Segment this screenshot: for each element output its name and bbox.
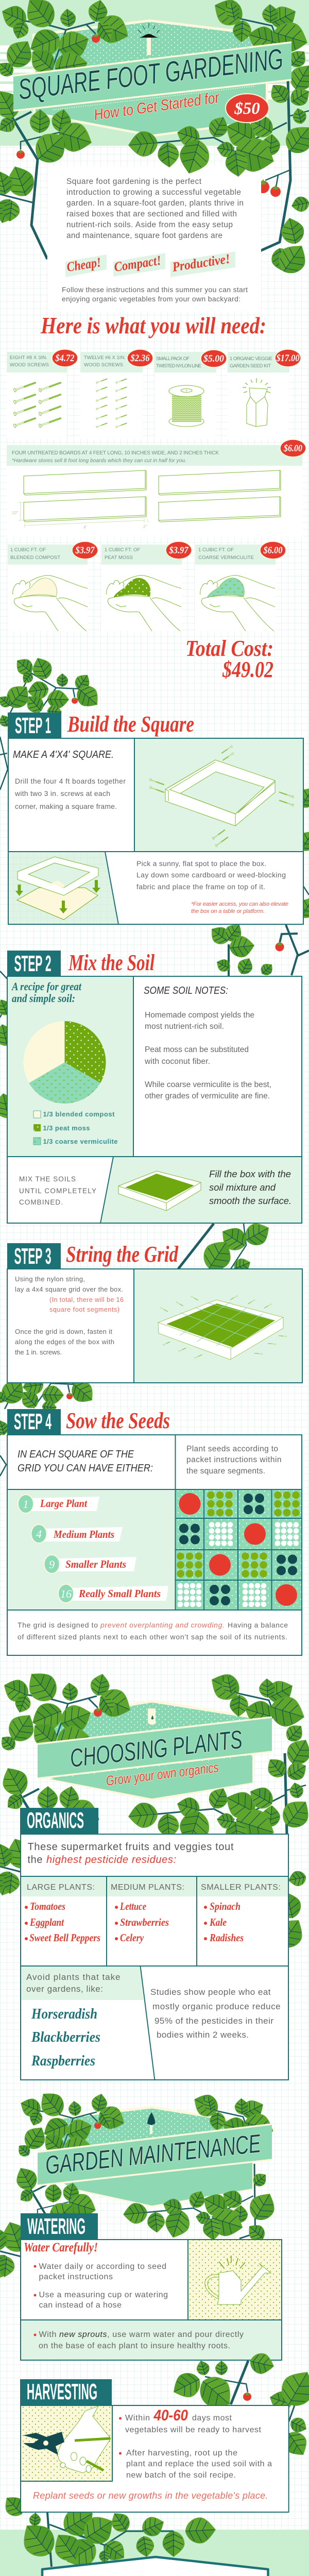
vine: maintenance left branch: [12, 2163, 99, 2232]
avoid plants: over gardens, like:: [26, 1984, 103, 1994]
step 4 note: the square segments.: [186, 1467, 265, 1476]
header emblem: [33, 21, 267, 135]
illustration: pruning hand: [21, 2405, 112, 2481]
section emblem: garden maintenance: [49, 2107, 252, 2206]
panel: 3 inch screws: $4.72: [55, 353, 75, 364]
step 3 text: [15, 1275, 124, 1356]
follow text: enjoying organic vegetables from your own backyard:: [62, 295, 241, 303]
panel: organics: [21, 1834, 288, 2080]
tag: compact: Compact!: [113, 253, 162, 275]
soil notes: SOME SOIL NOTES:: [144, 985, 228, 996]
column: medium plants: Lettuce: [119, 1900, 146, 1912]
subheading: grow your own organics: Grow your own organics: [105, 1759, 219, 1789]
intro paragraph: Square foot gardening is the perfect: [66, 177, 202, 186]
legend: 1/3 blended compost: [43, 1110, 115, 1118]
intro paragraph: introduction to growing a successful vegetable: [66, 188, 241, 197]
pie chart: [23, 1021, 106, 1104]
panel: harvesting: [21, 2405, 289, 2512]
step 1 body text: Drill the four 4 ft boards together: [15, 777, 126, 785]
harvesting bullets: vegetables will be ready to harvest: [125, 2426, 262, 2434]
studies note: 95% of the pesticides in their: [154, 2016, 273, 2026]
vine: above step 1: [0, 654, 104, 718]
column: smaller plants: SMALLER PLANTS:: [201, 1883, 281, 1892]
total cost: [185, 636, 273, 682]
panel: nylon line: $5.00: [203, 353, 224, 364]
panel: compost: BLENDED COMPOST: [10, 555, 60, 561]
tab: step 1: STEP 1: [15, 713, 51, 738]
tag: really small plants: [58, 1584, 168, 1603]
water carefully heading: Water Carefully!: [24, 2241, 98, 2255]
tag: smaller plants: 9: [49, 1558, 55, 1571]
illustration: frame over cardboard: [15, 857, 100, 920]
legend: [33, 1110, 117, 1145]
panel: 3 inch screws: EIGHT #8 X 3IN.: [10, 355, 47, 361]
total cost: Total Cost:: [185, 636, 273, 661]
fill instruction: [209, 1169, 291, 1206]
tag: cheap: Cheap!: [66, 255, 102, 275]
tag: really small plants: Really Small Plants: [78, 1587, 161, 1600]
panel: nylon line: SMALL PACK OF: [156, 356, 190, 362]
panel: 1 inch screws: $2.36: [130, 353, 150, 364]
sprouts note: With new sprouts, use warm water and pour directly: [39, 2330, 244, 2339]
vine: above step 3: [178, 1218, 274, 1276]
soil notes: Peat moss can be substituted: [145, 1045, 249, 1054]
panel: step 4: [7, 1435, 302, 1655]
panel: step 3: [7, 1269, 302, 1383]
organics intro: the: [28, 1854, 42, 1866]
studies note: Studies show people who eat: [150, 1987, 271, 1997]
panel: 1 inch screws: [80, 349, 153, 439]
step 1 placement text: [136, 859, 286, 891]
step 1 placement text: fabric and place the frame on top of it.: [136, 883, 265, 891]
legend: 1/3 peat moss: [43, 1124, 90, 1132]
sprouts note: on the base of each plant to insure healthy roots.: [39, 2342, 230, 2350]
panel: boards: $6.00: [283, 443, 302, 454]
tab: step 3: STEP 3: [14, 1244, 52, 1269]
vine: bottom right of header: [127, 111, 287, 178]
tab: step 1: [8, 713, 61, 738]
vine: maintenance top right: [190, 2090, 277, 2155]
avoid plants: [26, 1972, 121, 2069]
column: smaller plants: Kale: [209, 1916, 227, 1928]
illustration: filled box: [118, 1171, 201, 1211]
step 1 body text: [14, 777, 126, 810]
vine: below harvesting: [0, 2492, 216, 2573]
grid explanation: Having a balance: [228, 1621, 288, 1629]
organics intro: These supermarket fruits and veggies tout: [28, 1841, 234, 1853]
intro white box: [47, 166, 261, 312]
panel: 1 inch screws: WOOD SCREWS: [84, 362, 123, 368]
intro paragraph: and maintenance, square foot gardens are: [66, 231, 222, 240]
panel: seed kit: [228, 349, 301, 439]
vine: choosing top left: [0, 1665, 136, 1756]
total cost: $49.02: [222, 657, 273, 682]
soil notes: While coarse vermiculite is the best,: [145, 1080, 271, 1089]
step 3 text: (In total, there will be 16: [49, 1296, 124, 1303]
step 1 placement text: Pick a sunny, flat spot to place the box.: [136, 859, 266, 868]
vine: left of step 2: [0, 971, 19, 1120]
step 4 note: Plant seeds according to: [186, 1445, 278, 1453]
studies note: [150, 1987, 281, 2040]
sprouts note: [34, 2330, 244, 2350]
step 3 text: square foot segments): [49, 1306, 119, 1313]
column: smaller plants: Radishes: [209, 1931, 244, 1944]
step 1 body text: corner, making a square frame.: [15, 802, 117, 810]
panel: peat moss: $3.97: [169, 545, 189, 556]
heading: what you will need: Here is what you will need:: [40, 312, 266, 338]
bottom mint background: [0, 2530, 309, 2576]
organics intro: highest pesticide residues:: [46, 1854, 176, 1866]
vine: choosing right trunk: [254, 1734, 309, 1954]
fill instruction: smooth the surface.: [209, 1196, 291, 1206]
vine: choosing lower left leaves: [0, 1834, 38, 1899]
follow text: [62, 285, 248, 303]
tag: really small plants: 16: [60, 1587, 72, 1600]
tab: step 4: [7, 1409, 61, 1435]
tab: watering: [21, 2213, 98, 2240]
tab: step 4: STEP 4: [14, 1409, 52, 1434]
panel: boards: [7, 439, 306, 537]
tab: harvesting: [20, 2379, 112, 2405]
replant note: Replant seeds or new growths in the vegetable's place.: [33, 2490, 268, 2501]
follow text: Follow these instructions and this summer you can start: [62, 285, 248, 294]
vine: choosing top right: [206, 1668, 309, 1745]
vine: above harvesting: [168, 2351, 276, 2416]
harvesting bullets: After harvesting, root up the: [126, 2449, 237, 2458]
tag: medium plants: 4: [36, 1528, 42, 1540]
tag: medium plants: [31, 1524, 123, 1543]
soil notes: most nutrient-rich soil.: [145, 1022, 224, 1031]
step 1 heading text: MAKE A 4'X4' SQUARE.: [13, 749, 114, 760]
panel: seed kit: 1 ORGANIC VEGGIE: [230, 356, 272, 362]
fill instruction: Fill the box with the: [209, 1169, 291, 1179]
soil notes: other grades of vermiculite are fine.: [145, 1092, 270, 1100]
step 3 text: Using the nylon string,: [15, 1275, 85, 1283]
harvesting bullets: new batch of the soil recipe.: [126, 2471, 236, 2480]
watering bullets: Water daily or according to seed: [39, 2262, 166, 2271]
vine: left branch: [0, 86, 96, 170]
icon: watering can: [205, 2256, 271, 2304]
tag: large plant: Large Plant: [40, 1497, 88, 1510]
column: large plants: LARGE PLANTS:: [27, 1883, 95, 1892]
vine: maintenance bottom right: [122, 2186, 253, 2241]
step 4 heading: [18, 1449, 153, 1474]
fill instruction: soil mixture and: [209, 1182, 276, 1193]
watering bullets: [34, 2262, 168, 2310]
tag: large plant: 1: [23, 1498, 29, 1511]
title ribbon: choosing plants: [38, 1717, 272, 1778]
panel: compost: $3.97: [75, 545, 95, 556]
icon: trowel: [147, 2112, 155, 2134]
vine: choosing bottom right: [127, 1782, 287, 1850]
tag: productive: Productive!: [171, 251, 231, 275]
harvesting bullets: 40-60: [153, 2407, 188, 2424]
step 1 note: *For easier access, you can also elevate: [191, 901, 288, 907]
avoid plants: Raspberries: [31, 2053, 95, 2069]
panel: boards: FOUR UNTREATED BOARDS AT 4 FEET LONG, 10 INCHES WIDE, AND 2 INCHES THICK: [12, 450, 219, 456]
tag: smaller plants: Smaller Plants: [65, 1558, 126, 1570]
studies note: mostly organic produce reduce: [152, 2002, 281, 2011]
organics intro: [28, 1841, 234, 1866]
emblem lower fill: [35, 52, 266, 134]
step 1 body text: with two 3 in. screws at each: [14, 789, 110, 798]
legend: 1/3 coarse vermiculite: [43, 1138, 117, 1145]
header mint background: [0, 0, 309, 146]
panel: peat moss: PEAT MOSS: [105, 555, 133, 561]
column: medium plants: Celery: [120, 1931, 144, 1944]
tab: harvesting: HARVESTING: [27, 2379, 97, 2404]
heading: sow the seeds: Sow the Seeds: [66, 1408, 170, 1433]
panel: compost: 1 CUBIC FT. OF: [10, 547, 46, 553]
soil notes: [144, 985, 271, 1100]
harvesting bullets: plant and replace the used soil with a: [126, 2460, 272, 2468]
step 3 text: lay a 4x4 square grid over the box.: [15, 1285, 123, 1293]
harvesting bullets: [119, 2407, 272, 2480]
studies note: bodies within 2 weeks.: [157, 2030, 249, 2040]
vine: above step 4: [0, 1350, 99, 1414]
panel: step 1: [8, 738, 303, 924]
intro paragraph: nutrient-rich soils. Aside from the easy setup: [66, 221, 233, 229]
panel: 1 inch screws: TWELVE #6 X 1IN.: [84, 355, 126, 361]
step 4 note: packet instructions within: [186, 1455, 281, 1464]
illustration: assembled frame with screws: [149, 745, 294, 847]
tab: step 3: [7, 1243, 61, 1269]
column: medium plants: [111, 1883, 184, 1944]
badge: $50: $50: [234, 99, 260, 118]
avoid plants: Horseradish: [31, 2006, 97, 2022]
vine: top right: [209, 0, 309, 71]
tab: organics: ORGANICS: [27, 1808, 84, 1833]
column: large plants: Sweet Bell Peppers: [29, 1931, 100, 1944]
panel: boards: 2": [143, 524, 147, 529]
step 3 text: the 1 in. screws.: [15, 1348, 62, 1356]
panel: vermiculite: [195, 541, 286, 631]
section emblem: choosing plants: [38, 1701, 252, 1800]
harvesting bullets: Within: [125, 2414, 150, 2422]
step 3 text: along the edges of the box with: [15, 1338, 114, 1346]
vine: right of harvesting: [267, 2364, 309, 2461]
panel: boards: 10": [12, 511, 19, 515]
vine: maintenance right trunk: [239, 2164, 281, 2244]
intro paragraph: [66, 177, 244, 240]
recipe heading: [11, 980, 82, 1005]
panel: vermiculite: $6.00: [263, 545, 283, 556]
watering bullets: Use a measuring cup or watering: [39, 2291, 168, 2299]
panel: vermiculite: COARSE VERMICULITE: [198, 555, 254, 561]
icon: seed bag: [148, 1708, 156, 1725]
vine: left of step 4: [0, 1419, 10, 1476]
planting grid: [175, 1489, 302, 1610]
panel: step 2: [7, 976, 302, 1223]
avoid plants: Avoid plants that take: [26, 1972, 121, 1982]
vine: right trunk: [257, 60, 309, 279]
intro paragraph: garden. In a square-foot garden, plants thrive in: [66, 199, 244, 208]
title ribbon: garden maintenance: [38, 2124, 272, 2185]
recipe heading: A recipe for great: [11, 980, 82, 993]
panel: vermiculite: 1 CUBIC FT. OF: [198, 547, 234, 553]
column: smaller plants: Spinach: [210, 1900, 241, 1912]
tag: medium plants: Medium Plants: [53, 1528, 114, 1540]
panel: peat moss: 1 CUBIC FT. OF: [105, 547, 140, 553]
mix text: [19, 1175, 96, 1206]
vine: right of step 1: [294, 784, 309, 922]
step 4 heading: IN EACH SQUARE OF THE: [18, 1449, 134, 1460]
heading: build the square: Build the Square: [67, 711, 194, 737]
step 1 note: the box on a table or platform.: [191, 908, 265, 914]
tab: step 2: [7, 951, 61, 976]
panel: nylon line: [154, 350, 227, 439]
vine: top left: [0, 0, 134, 82]
mix text: MIX THE SOILS: [19, 1175, 76, 1183]
title ribbon: [13, 42, 291, 111]
step 1 note: [191, 901, 288, 914]
tag: large plant: [18, 1495, 99, 1513]
grid explanation: of different sized plants next to each other won't sap the soil of its nutrients.: [18, 1633, 287, 1641]
panel: peat moss: [101, 541, 192, 631]
tab: step 2: STEP 2: [14, 951, 52, 976]
vine: maintenance lower left leaves: [0, 2217, 33, 2282]
tab: organics: [20, 1808, 98, 1834]
panel: nylon line: TWISTED NYLON LINE: [156, 363, 201, 369]
mix text: COMBINED.: [19, 1198, 63, 1206]
vine: lower left leaves: [0, 162, 38, 226]
grid explanation: The grid is designed to: [18, 1621, 98, 1629]
heading: mix the soil: Mix the Soil: [68, 950, 155, 975]
badge: $50: [226, 94, 269, 123]
soil notes: with coconut fiber.: [144, 1057, 210, 1066]
grid explanation: [18, 1621, 288, 1641]
tag: smaller plants: [44, 1555, 136, 1573]
icon: t-square: [138, 23, 160, 55]
step 4 note: [186, 1445, 281, 1476]
panel: seed kit: GARDEN SEED KIT: [230, 363, 271, 369]
step 1 placement text: Lay down some cardboard or weed-blocking: [136, 871, 286, 879]
column: large plants: [25, 1883, 100, 1944]
subtitle: How to Get Started for: [93, 89, 220, 124]
vine: left of step 1: [0, 713, 12, 790]
vine: right between step 1 and 2: [207, 920, 309, 978]
column: medium plants: Strawberries: [120, 1916, 169, 1928]
panel: 3 inch screws: [7, 349, 78, 439]
intro paragraph: raised boxes that are sectioned and filled with: [66, 210, 237, 218]
column: medium plants: MEDIUM PLANTS:: [111, 1883, 184, 1892]
tab: watering: WATERING: [27, 2214, 85, 2239]
panel: 3 inch screws: WOOD SCREWS: [10, 362, 49, 368]
panel: compost: [8, 541, 98, 631]
vine: choosing left branch: [0, 1762, 104, 1846]
column: large plants: Eggplant: [29, 1916, 64, 1928]
panel: seed kit: $17.00: [276, 353, 300, 364]
panel: boards: *Hardware stores sell 8 foot long boards which they can cut in half for you.: [12, 458, 186, 464]
harvesting bullets: days most: [192, 2414, 232, 2422]
watering bullets: packet instructions: [39, 2273, 113, 2281]
dashed line: [53, 86, 255, 110]
mix text: UNTIL COMPLETELY: [19, 1187, 96, 1195]
watering bullets: can instead of a hose: [39, 2301, 122, 2310]
step 3 text: Once the grid is down, fasten it: [15, 1328, 112, 1335]
soil notes: Homemade compost yields the: [145, 1011, 254, 1020]
column: smaller plants: [201, 1883, 281, 1944]
column: large plants: Tomatoes: [30, 1900, 65, 1912]
grid explanation: prevent overplanting and crowding.: [100, 1621, 225, 1629]
panel: watering: [21, 2240, 282, 2360]
illustration: strung grid: [158, 1295, 287, 1360]
vine: lower left trunk: [31, 160, 47, 259]
panel: boards: 4': [83, 525, 87, 530]
avoid plants: Blackberries: [31, 2029, 100, 2045]
closing box: [42, 2557, 268, 2576]
step 4 heading: GRID YOU CAN HAVE EITHER:: [18, 1463, 153, 1474]
heading: string the grid: String the Grid: [66, 1242, 179, 1267]
vine: maintenance top left: [15, 2087, 129, 2161]
recipe heading: and simple soil:: [12, 992, 75, 1005]
